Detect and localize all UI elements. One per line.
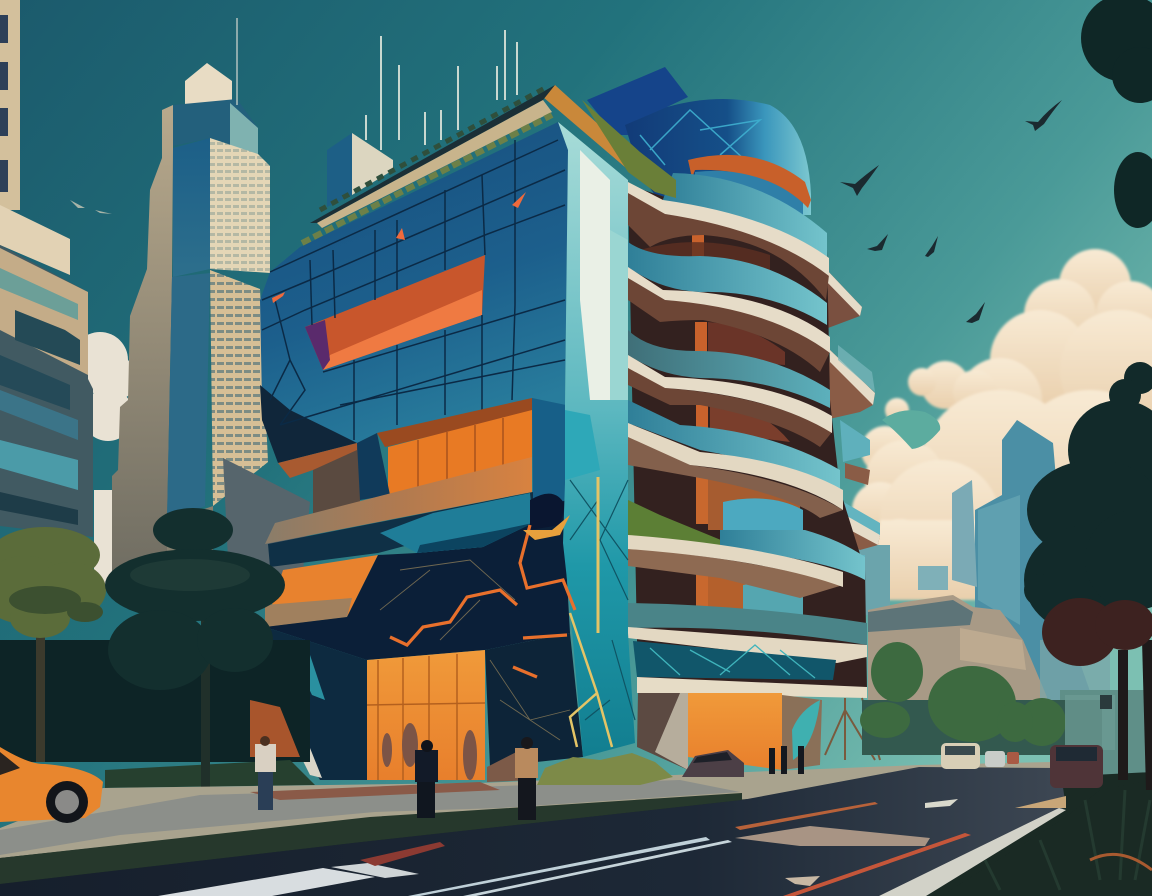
floor 4 railing (628, 400, 840, 492)
low hedge (105, 760, 315, 788)
orange sports car (0, 747, 103, 822)
interior warm panels (640, 235, 803, 625)
back tree wall (0, 640, 310, 762)
cream face upper (210, 138, 270, 273)
floor 1 railing (662, 173, 827, 257)
stilts (825, 698, 880, 760)
top glass section (173, 99, 258, 154)
dark band (268, 492, 533, 567)
white car (941, 743, 980, 769)
roof slab underside (543, 85, 630, 168)
street sign (1100, 695, 1112, 709)
red distant car (1007, 752, 1019, 764)
left skyscraper (112, 18, 310, 600)
birds (70, 100, 1062, 323)
people (255, 736, 804, 820)
tree left two (105, 508, 285, 788)
red plaza reflection (250, 782, 500, 800)
far light patch (1015, 796, 1066, 808)
road (0, 767, 1066, 896)
small facade accents (272, 192, 526, 303)
floor 6 railing (628, 603, 867, 645)
small white car (985, 751, 1005, 767)
floor 3 railing (628, 330, 830, 408)
interior backdrop (628, 185, 867, 690)
bird top right (1025, 100, 1062, 131)
right curved wing of building (625, 99, 880, 770)
orange soffit (278, 443, 357, 478)
upper volume (260, 122, 568, 463)
floor 5 railing (720, 530, 865, 580)
blue face lower (167, 273, 210, 522)
ground sidewalk (0, 762, 1066, 858)
floor 2 underside (628, 278, 830, 372)
brown curved wall (250, 700, 300, 757)
small back tower (327, 133, 393, 207)
ground orange door (367, 650, 485, 780)
teal mural band (633, 641, 836, 680)
distant skyline right (850, 420, 1152, 785)
door reflections (382, 723, 477, 780)
person tan (515, 737, 538, 820)
person dark (415, 740, 438, 818)
floor 2 slab (628, 267, 830, 353)
roof dark slab (310, 85, 555, 223)
orange vein lines (390, 525, 575, 677)
mural lines (650, 645, 815, 678)
upper lit window (305, 255, 485, 370)
rooftop masts (366, 30, 517, 150)
roof greenery (302, 115, 552, 243)
door mullions (367, 654, 485, 780)
floor 2 railing (628, 242, 827, 325)
right outrigger balconies (805, 268, 880, 585)
orange road line (735, 802, 878, 830)
dark column (357, 433, 390, 500)
clouds left (72, 332, 136, 590)
dark lower-left reflection (260, 385, 357, 463)
strip line work (570, 480, 635, 720)
floor 1 slab (628, 182, 829, 276)
floor 4 underside (628, 435, 843, 518)
teal swoop (792, 700, 820, 760)
floor 5 greenery (628, 500, 738, 547)
orange arch (688, 155, 811, 208)
crown (185, 63, 232, 108)
ground wall (637, 693, 688, 770)
mullions (418, 418, 503, 505)
ground base (0, 772, 1152, 896)
dark facade line work (380, 560, 570, 740)
main facade (260, 85, 676, 782)
shrubs at base (537, 753, 673, 785)
floor 3 underside (628, 366, 832, 447)
top right blue cube (587, 67, 688, 135)
teal reflection patch (380, 493, 533, 553)
floor 5 slab (628, 535, 843, 587)
trees mid right (860, 642, 1115, 755)
panel lines (262, 140, 565, 440)
right lower dark (485, 633, 583, 767)
shadow on sidewalk (0, 780, 740, 855)
tree left one (0, 527, 106, 762)
right large tree (1024, 362, 1152, 790)
median planter (0, 793, 742, 884)
top right tree (1081, 0, 1152, 228)
bird large centre (840, 165, 879, 196)
balcony glass rail (265, 457, 532, 544)
ground floor slab (637, 677, 867, 698)
person white sweater (255, 736, 276, 810)
ground orange door (688, 693, 782, 770)
antenna (236, 18, 238, 105)
lower lit floor (265, 555, 378, 627)
strip white panel (580, 150, 610, 400)
right ground wall (782, 695, 822, 770)
grey podium (223, 458, 310, 600)
arch inner glass (695, 171, 803, 225)
blue facade right of lit floor (532, 398, 566, 512)
sky gap in cloud (882, 410, 940, 449)
big dark lower facade (265, 500, 570, 660)
floor 5 underside (628, 548, 843, 598)
floor 1 underside (628, 190, 829, 300)
cars (0, 743, 1103, 823)
dark suv (1050, 745, 1103, 788)
dark blob (530, 494, 565, 530)
floor 3 slab (628, 355, 832, 433)
clouds right (852, 249, 1152, 600)
glass corner strip (558, 122, 635, 757)
floor 6 slab (628, 627, 867, 663)
red bike line (783, 833, 971, 896)
road markings (158, 799, 958, 896)
rotunda lines (640, 110, 760, 165)
blue face upper (173, 138, 210, 277)
cream face lower (210, 270, 268, 506)
gold lines (570, 477, 612, 747)
rotunda (625, 99, 811, 215)
tower stepped side (112, 105, 205, 600)
far left building (0, 0, 93, 537)
distant figures (769, 746, 804, 774)
right curb (879, 808, 1066, 896)
mid lit floor ceiling (377, 398, 532, 447)
left room (313, 443, 360, 520)
right foreground plants (941, 780, 1152, 896)
gold blob (523, 515, 570, 540)
roof cream lip (317, 100, 552, 228)
dark sedan (682, 750, 744, 777)
floor 4 slab (628, 423, 843, 510)
mid lit floor (388, 410, 532, 515)
lower left facade (265, 627, 367, 780)
road light patches (735, 826, 930, 846)
